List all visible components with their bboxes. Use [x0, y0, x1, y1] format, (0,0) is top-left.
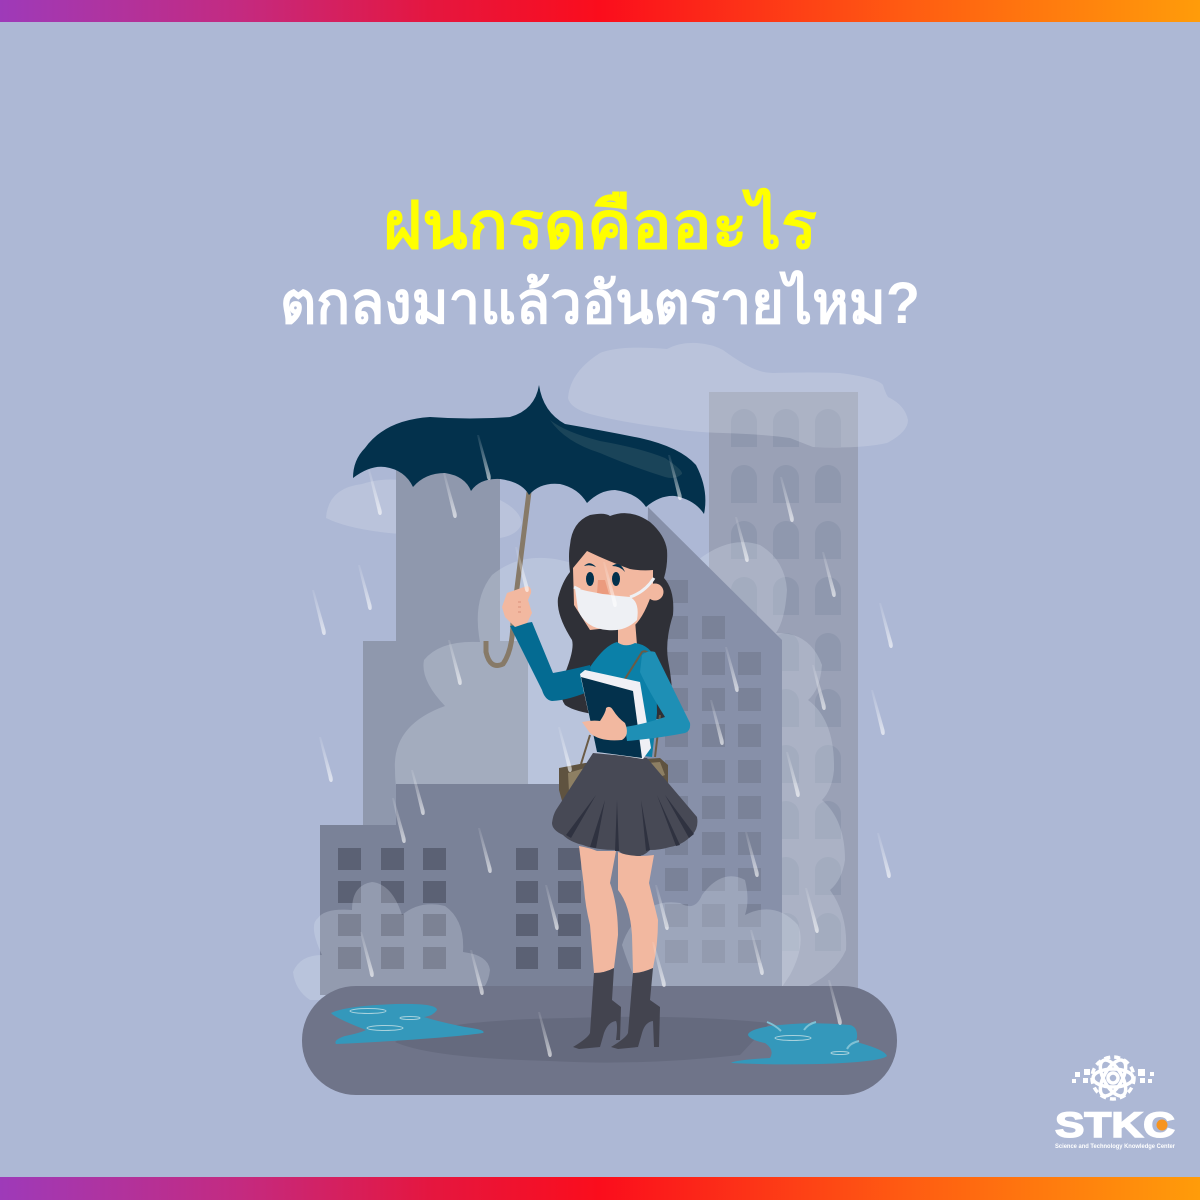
- woman with mask and book: [502, 513, 697, 1049]
- hair: [558, 513, 673, 720]
- holding arm: [625, 651, 690, 741]
- rain: [312, 435, 893, 1057]
- bottom gradient bar: [0, 1177, 1200, 1200]
- puddle left: [331, 1004, 484, 1044]
- top gradient bar: [0, 0, 1200, 22]
- small cloud behind left tower: [326, 480, 522, 538]
- eyes: [584, 563, 625, 586]
- logo caption: Science and Technology Knowledge Center: [1055, 1144, 1176, 1150]
- title: white subheading: ตกลงมาแล้วอันตรายไหม?: [280, 270, 920, 336]
- neck: [618, 620, 637, 650]
- large cloud at top right: [568, 343, 908, 448]
- ground shadow: [395, 1017, 770, 1063]
- title: yellow heading: ฝนกรดคืออะไร: [383, 187, 817, 262]
- umbrella handle: [486, 492, 529, 666]
- bag: [559, 715, 668, 815]
- mask: [574, 578, 654, 630]
- logo orange dot: [1156, 1120, 1168, 1130]
- face: [573, 551, 653, 630]
- legs: [579, 846, 658, 973]
- far right tall building: [709, 392, 858, 992]
- fog in front, bottom left: [293, 882, 490, 1000]
- umbrella canopy: [353, 385, 705, 514]
- triangular roof building: [640, 507, 782, 990]
- nose: [597, 580, 609, 594]
- torso, shirt: [590, 642, 657, 757]
- logo wordmark: STKC: [1055, 1106, 1175, 1145]
- fog behind left tower and centre: [395, 558, 640, 800]
- shoulder strap: [618, 651, 655, 690]
- puddle right: [731, 1022, 887, 1064]
- fog behind right building: [698, 542, 846, 990]
- logo atom icon: [1092, 1056, 1134, 1100]
- skirt: [552, 753, 697, 857]
- left tower: [363, 470, 528, 1000]
- logo pixel squares: [1072, 1069, 1154, 1083]
- raised arm: [510, 622, 592, 701]
- front low building: [320, 784, 640, 995]
- ear: [646, 584, 664, 600]
- fog in front, bottom right: [622, 876, 801, 990]
- umbrella highlight: [550, 420, 682, 478]
- illustration: rainy city scene: [293, 343, 908, 1095]
- ground: [302, 986, 897, 1095]
- STKC logo: [1055, 1056, 1176, 1150]
- holding hand: [582, 707, 627, 740]
- book: [580, 670, 651, 759]
- boots: [573, 968, 660, 1049]
- raised hand: [502, 586, 532, 627]
